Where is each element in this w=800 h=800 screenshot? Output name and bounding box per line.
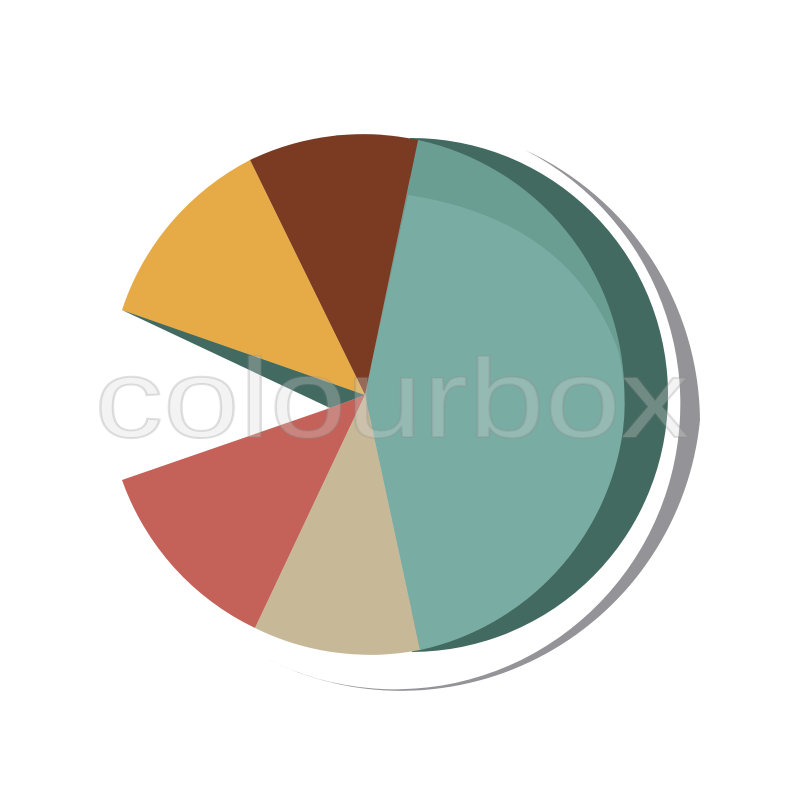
slice: red bbox=[122, 395, 365, 628]
shadow arc bbox=[262, 150, 700, 691]
slice: teal (largest) bbox=[365, 140, 625, 650]
back layer: dark green bbox=[410, 138, 668, 652]
watermark: colourbox bbox=[94, 336, 690, 461]
slice: dark sliver bbox=[122, 310, 365, 408]
slice: orange bbox=[122, 160, 365, 395]
slice: beige bbox=[255, 395, 420, 655]
slice: brown bbox=[250, 134, 418, 395]
